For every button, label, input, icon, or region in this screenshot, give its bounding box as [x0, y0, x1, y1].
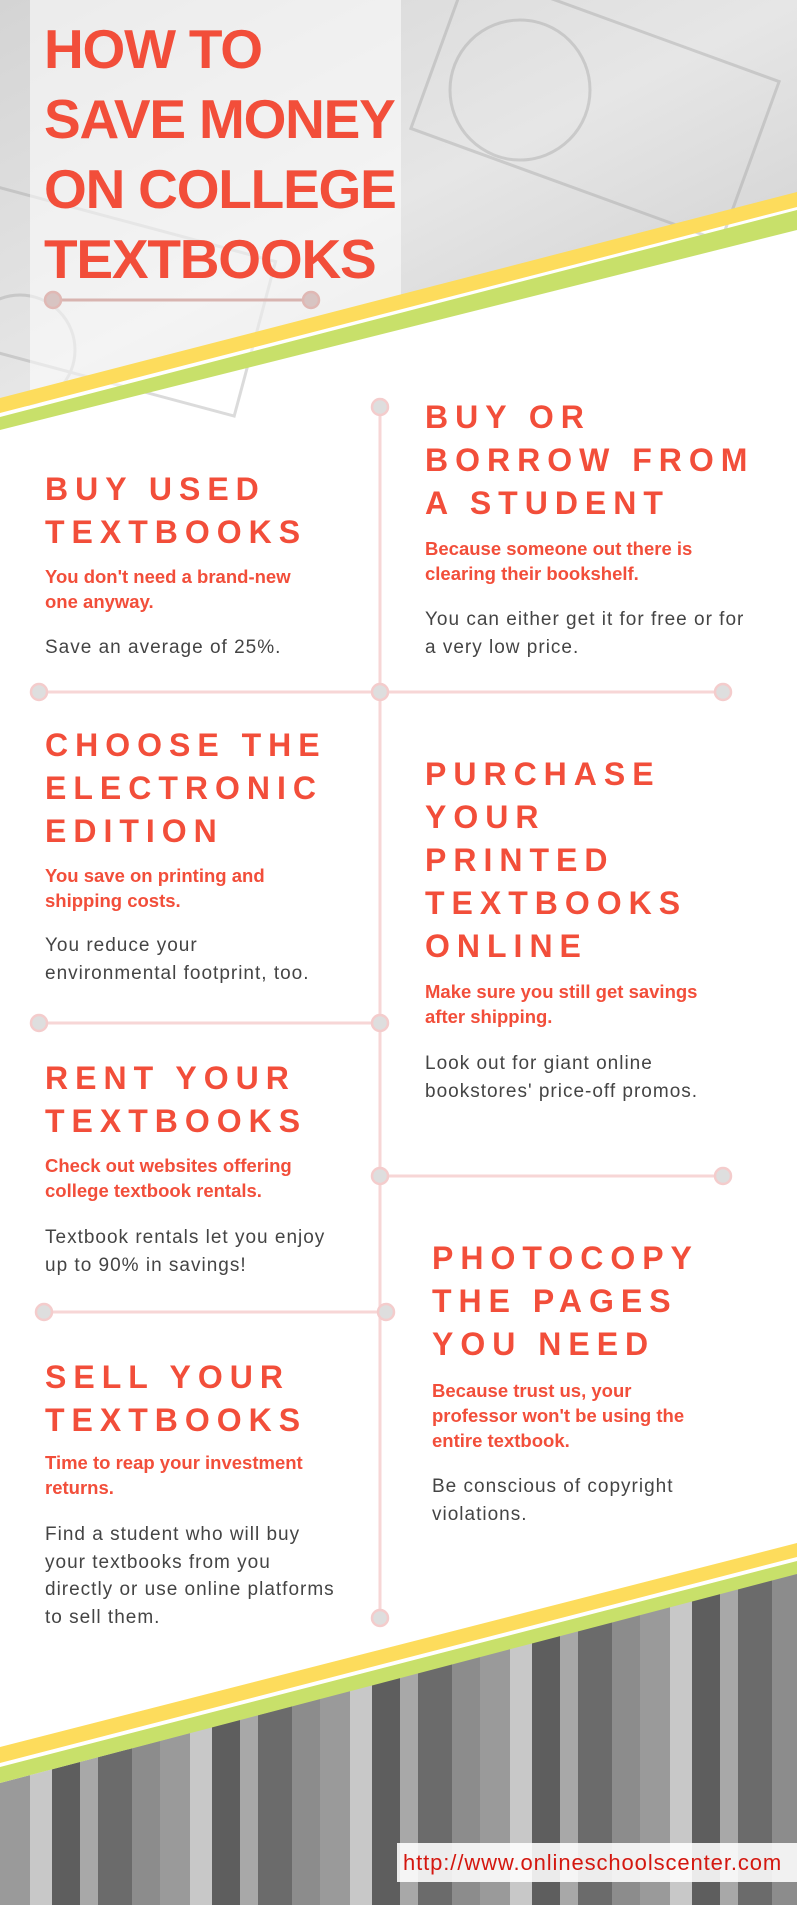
text: returns.	[45, 1477, 114, 1498]
text: You can either get it for free or for	[425, 609, 744, 630]
text: PURCHASE	[425, 756, 661, 792]
title: HOW TO	[44, 18, 262, 80]
text: A STUDENT	[425, 485, 670, 521]
text: bookstores' price-off promos.	[425, 1080, 698, 1102]
text: BORROW FROM	[425, 442, 754, 478]
text: BUY USED	[45, 471, 266, 507]
title: TEXTBOOKS	[44, 228, 375, 290]
text: You reduce your	[45, 935, 198, 956]
text: BUY OR	[425, 399, 591, 435]
text: TEXTBOOKS	[45, 1402, 307, 1438]
bottom stripes	[0, 1543, 797, 1763]
text: your textbooks from you	[45, 1552, 271, 1572]
text: Time to reap your investment	[45, 1452, 303, 1473]
section: electronic	[45, 727, 327, 984]
text: ELECTRONIC	[45, 770, 323, 806]
text: clearing their bookshelf.	[425, 563, 639, 584]
title: SAVE MONEY	[44, 88, 395, 150]
text: Find a student who will buy	[45, 1524, 300, 1545]
text: PHOTOCOPY	[432, 1240, 699, 1276]
url footer: http://www.onlineschoolscenter.com	[403, 1850, 782, 1875]
text: college textbook rentals.	[45, 1180, 262, 1201]
bottom photo: books	[0, 1573, 797, 1905]
text: PRINTED	[425, 842, 614, 878]
text: Textbook rentals let you enjoy	[45, 1227, 325, 1248]
text: TEXTBOOKS	[45, 1103, 307, 1139]
text: entire textbook.	[432, 1430, 570, 1451]
text: YOU NEED	[432, 1326, 655, 1362]
text: shipping costs.	[45, 890, 181, 911]
text: ONLINE	[425, 928, 588, 964]
text: Be conscious of copyright	[432, 1476, 674, 1497]
text: TEXTBOOKS	[425, 885, 687, 921]
text: CHOOSE THE	[45, 727, 327, 763]
text: Because someone out there is	[425, 538, 692, 559]
text: directly or use online platforms	[45, 1579, 335, 1600]
text: RENT YOUR	[45, 1060, 296, 1096]
text: You don't need a brand-new	[45, 566, 291, 587]
white title panel	[30, 0, 401, 419]
text: Check out websites offering	[45, 1155, 292, 1176]
text: professor won't be using the	[432, 1405, 684, 1426]
title: ON COLLEGE	[44, 158, 396, 220]
text: EDITION	[45, 813, 224, 849]
section: buy used	[45, 471, 307, 658]
timeline lines	[39, 300, 723, 1618]
text: Save an average of 25%.	[45, 637, 281, 658]
text: YOUR	[425, 799, 545, 835]
section: online	[425, 756, 698, 1102]
text: to sell them.	[45, 1606, 160, 1628]
text: Look out for giant online	[425, 1053, 653, 1074]
text: TEXTBOOKS	[45, 514, 307, 550]
title	[44, 18, 396, 290]
top stripes	[0, 192, 797, 413]
text: You save on printing and	[45, 865, 265, 886]
section: rent	[45, 1060, 325, 1276]
text: Make sure you still get savings	[425, 981, 697, 1002]
section: borrow	[425, 399, 754, 658]
text: one anyway.	[45, 591, 154, 612]
text: violations.	[432, 1504, 528, 1524]
section: sell	[45, 1359, 335, 1628]
top photo: money	[0, 0, 797, 400]
text: SELL YOUR	[45, 1359, 290, 1395]
url footer	[397, 1843, 797, 1882]
text: after shipping.	[425, 1006, 552, 1027]
text: up to 90% in savings!	[45, 1254, 247, 1276]
section: photocopy	[432, 1240, 699, 1524]
text: THE PAGES	[432, 1283, 678, 1319]
text: a very low price.	[425, 636, 579, 658]
text: Because trust us, your	[432, 1380, 631, 1401]
text: environmental footprint, too.	[45, 962, 310, 984]
